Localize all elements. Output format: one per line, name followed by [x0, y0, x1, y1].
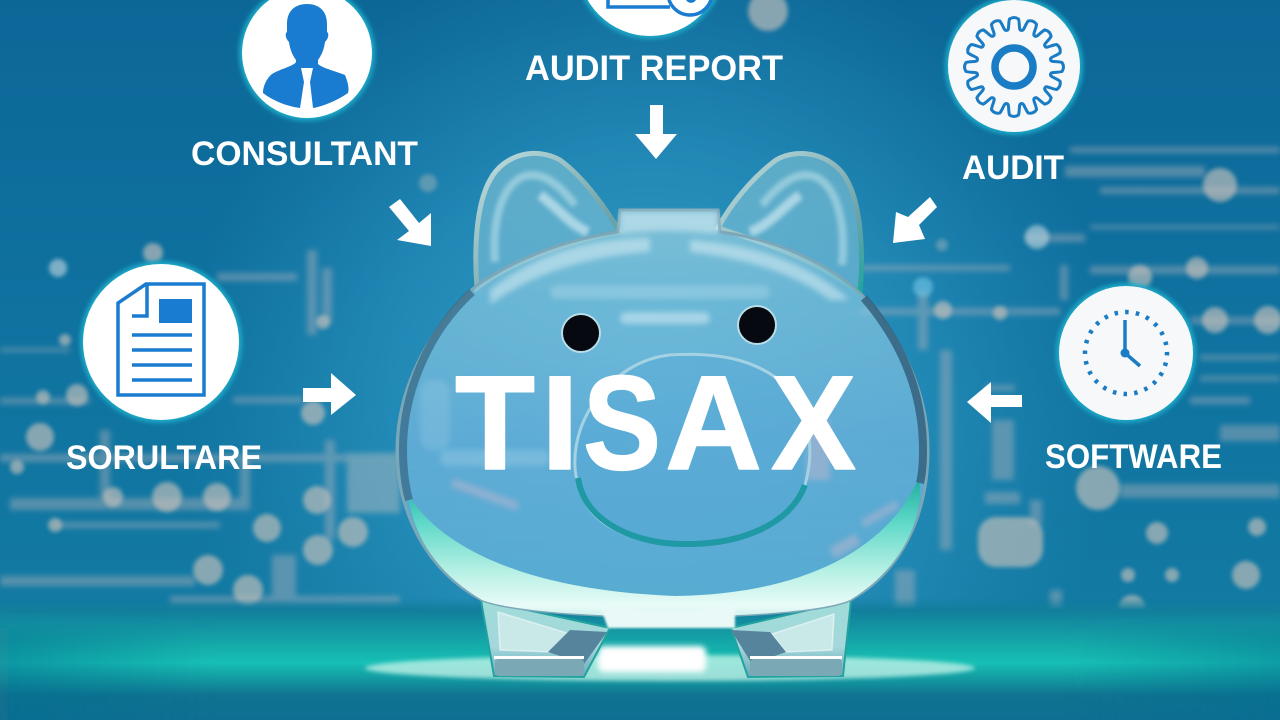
floor glow under the pig	[365, 655, 975, 681]
bright light between the feet	[598, 646, 706, 672]
title: TISAX: S	[583, 349, 661, 498]
title: TISAX: T	[455, 349, 535, 498]
arrow: consultant to pig	[389, 199, 431, 246]
blurred bokeh dots: right	[748, 0, 1280, 621]
audit circle	[945, 0, 1083, 135]
white band between the feet	[600, 606, 735, 628]
node: consultant	[191, 0, 431, 246]
sorultare label: SORULTARE	[66, 439, 262, 477]
node: audit	[893, 0, 1083, 243]
title: TISAX	[455, 349, 856, 498]
title: TISAX: I	[541, 349, 579, 498]
dark left edge highlight	[403, 292, 472, 500]
blurred circuit traces: left	[0, 250, 400, 605]
icon: person in suit	[263, 4, 349, 108]
snout	[575, 354, 810, 544]
right foot	[731, 600, 851, 677]
left foot	[481, 600, 610, 677]
node: software	[967, 283, 1222, 476]
consultant circle	[239, 0, 375, 121]
sorultare circle	[80, 261, 242, 423]
icon: document	[118, 284, 204, 395]
audit label: AUDIT	[962, 149, 1064, 187]
arrow: report to pig	[635, 105, 677, 159]
title: TISAX: A	[665, 349, 762, 498]
pink glass reflections	[451, 420, 899, 559]
title: TISAX: X	[771, 349, 856, 498]
audit report circle	[575, 0, 725, 39]
node: sorultare	[66, 261, 356, 477]
floor	[0, 598, 1280, 720]
blurred bokeh dots: left	[10, 174, 437, 605]
arrow: sorultare to pig	[303, 373, 356, 415]
floor edge shading	[0, 628, 1280, 720]
icon: report and magnifier	[608, 0, 712, 15]
arrow: software to pig	[967, 382, 1022, 423]
dark right edge highlight	[864, 298, 923, 483]
blurred circuit traces: right	[860, 147, 1280, 620]
software label: SOFTWARE	[1045, 438, 1222, 476]
arrow: audit to pig	[893, 197, 937, 243]
node: audit report	[525, 0, 783, 159]
icon: gear	[964, 18, 1064, 116]
piggy bank	[397, 153, 928, 677]
lower teal crescent of the glass	[408, 478, 920, 616]
left ear	[476, 153, 620, 288]
icon: clock	[1084, 311, 1168, 395]
audit report label: AUDIT REPORT	[525, 49, 783, 88]
right eye	[738, 306, 776, 344]
consultant label: CONSULTANT	[191, 135, 418, 173]
right ear	[718, 153, 862, 293]
body	[397, 210, 928, 616]
glass highlights	[420, 212, 850, 466]
software circle	[1056, 283, 1196, 423]
left eye	[562, 314, 600, 352]
